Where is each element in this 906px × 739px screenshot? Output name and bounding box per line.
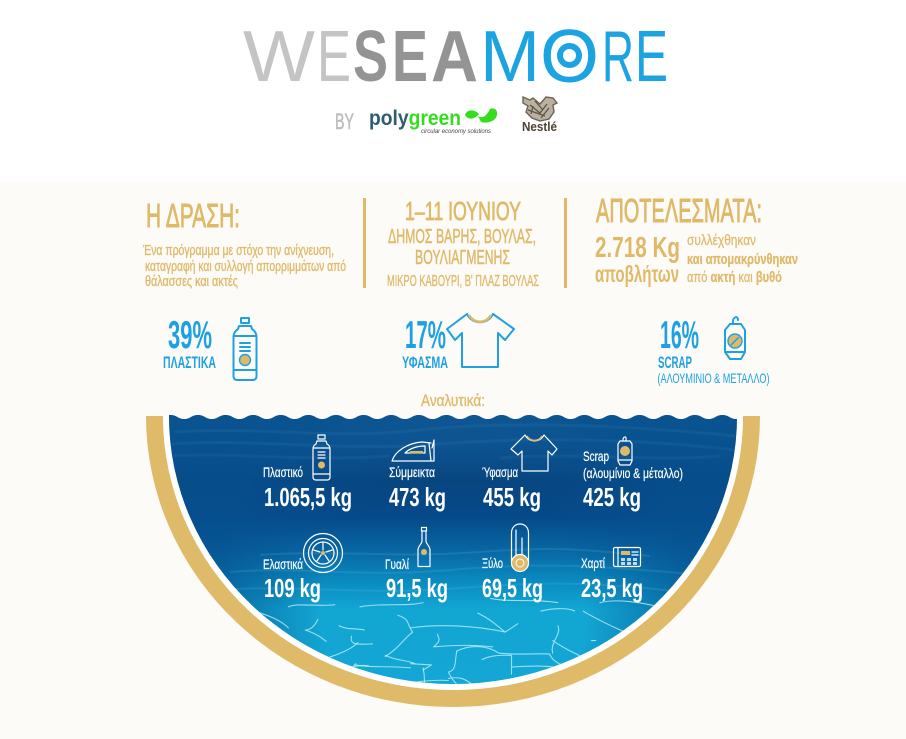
icon: can <box>618 437 632 465</box>
result total: αποβλήτων <box>595 261 679 287</box>
icon: t-shirt <box>447 314 514 367</box>
panel: the action <box>142 197 346 290</box>
icon: t-shirt <box>511 435 557 471</box>
item: mixed: 473 kg <box>389 482 446 512</box>
white gap ring <box>163 416 743 690</box>
infographic canvas <box>142 29 798 707</box>
icon: bottle <box>313 435 330 480</box>
divider right <box>564 198 567 288</box>
item: textile <box>482 435 557 512</box>
sponsor line <box>335 97 557 135</box>
item: plastic: 1.065,5 kg <box>264 482 352 512</box>
result details <box>687 232 798 286</box>
result total <box>595 232 680 287</box>
stat: plastic 39% <box>163 314 256 380</box>
item: rubber: 109 kg <box>264 573 321 603</box>
item: mixed <box>389 440 446 512</box>
logo: Nestle: Nestlé <box>522 120 557 134</box>
logo: WeSeaMore: E <box>635 17 668 97</box>
sea water <box>169 414 737 704</box>
icon: glass bottle <box>418 528 430 566</box>
item: scrap: 425 kg <box>583 482 641 512</box>
heading: results: ΑΠΟΤΕΛΕΣΜΑΤΑ: <box>596 192 762 229</box>
item: mixed: Σύμμεικτα <box>389 464 435 480</box>
panel: date and place <box>387 196 539 290</box>
logo: WeSeaMore: E <box>392 17 428 97</box>
item: rubber: Ελαστικά <box>263 556 303 572</box>
item: paper: Χαρτί <box>581 555 605 571</box>
wave edge <box>169 413 737 421</box>
logo: polygreen: polygreen <box>369 107 461 130</box>
stat: scrap 16% <box>658 314 770 386</box>
item: scrap: Scrap <box>583 448 609 464</box>
stat: plastic 39%: ΠΛΑΣΤΙΚΑ <box>163 353 216 372</box>
text block: action description <box>142 243 346 290</box>
panel: date and place: ΜΙΚΡΟ ΚΑΒΟΥΡΙ, Β' ΠΛΑΖ ΒΟΥΛΑΣ <box>387 273 539 290</box>
icon: newspaper <box>614 548 640 566</box>
stat: scrap 16%: SCRAP <box>658 353 692 372</box>
logo: WeSeaMore: S <box>353 17 388 97</box>
stat: textile 17%: ΥΦΑΣΜΑ <box>402 353 448 372</box>
stat: scrap 16%: 16% <box>660 314 699 357</box>
item: glass: 91,5 kg <box>386 573 448 603</box>
item: plastic: Πλαστικό <box>263 464 303 480</box>
result details: συλλέχθηκαν <box>687 232 756 249</box>
item: textile: Ύφασμα <box>482 464 518 480</box>
logo: polygreen: circular economy solutions <box>421 129 491 135</box>
text: BY: BY <box>335 109 354 134</box>
logo: polygreen <box>369 107 497 135</box>
heading: action: Η ΔΡΑΣΗ: <box>146 197 240 234</box>
item: wood: 69,5 kg <box>482 573 543 603</box>
logo: WeSeaMore: W <box>243 17 315 97</box>
text block: action description: καταγραφή και συλλογή απορριμμάτων από <box>145 259 346 275</box>
panel: date and place: ΒΟΥΛΙΑΓΜΕΝΗΣ <box>415 247 510 269</box>
panel: results <box>595 192 798 287</box>
logo: Nestle <box>522 97 557 134</box>
logo: WeSeaMore <box>243 14 668 98</box>
text block: action description: θάλασσες και ακτές <box>145 274 238 290</box>
item: wood: Ξύλο <box>482 555 503 571</box>
logo: WeSeaMore: A <box>431 17 478 97</box>
item: glass <box>385 528 448 603</box>
water caustics <box>260 598 654 684</box>
text block: action description: Ένα πρόγραμμα με στόχο την ανίχνευση, <box>142 243 334 259</box>
divider left <box>363 198 366 288</box>
stat: scrap 16%: (ΑΛΟΥΜΙΝΙΟ & ΜΕΤΑΛΛΟ) <box>658 370 770 386</box>
logo: WeSeaMore: M <box>480 17 540 97</box>
icon: bottle <box>234 318 256 380</box>
item: textile: 455 kg <box>483 482 541 512</box>
logo: WeSeaMore: O <box>540 14 599 98</box>
heading: details: Αναλυτικά: <box>421 392 485 410</box>
panel: date and place: ΔΗΜΟΣ ΒΑΡΗΣ, ΒΟΥΛΑΣ, <box>388 226 536 248</box>
icon: iron <box>392 440 434 461</box>
panel: date and place: 1–11 ΙΟΥΝΙΟΥ <box>405 196 521 226</box>
stat: textile 17%: 17% <box>405 314 446 357</box>
result total: 2.718 Kg <box>595 232 680 264</box>
icon: wood log <box>512 524 528 572</box>
item: paper <box>581 548 643 603</box>
stat: plastic 39%: 39% <box>168 314 212 357</box>
gold semicircle frame <box>146 416 760 707</box>
item: wood <box>482 524 543 603</box>
item: scrap: (αλουμίνιο & μέταλλο) <box>583 465 683 481</box>
item: scrap <box>583 437 683 512</box>
icon: can <box>725 317 745 359</box>
page background panel <box>0 181 906 739</box>
result details: και απομακρύνθηκαν <box>687 251 798 268</box>
stat: textile 17% <box>402 314 514 372</box>
logo: WeSeaMore: E <box>317 17 351 97</box>
item: paper: 23,5 kg <box>581 573 643 603</box>
icon: tire <box>304 534 342 572</box>
item: rubber <box>263 534 342 603</box>
item: plastic <box>263 435 352 512</box>
logo: WeSeaMore: R <box>602 17 634 97</box>
item: glass: Γυαλί <box>385 556 409 572</box>
result details: από ακτή και βυθό <box>687 269 782 286</box>
